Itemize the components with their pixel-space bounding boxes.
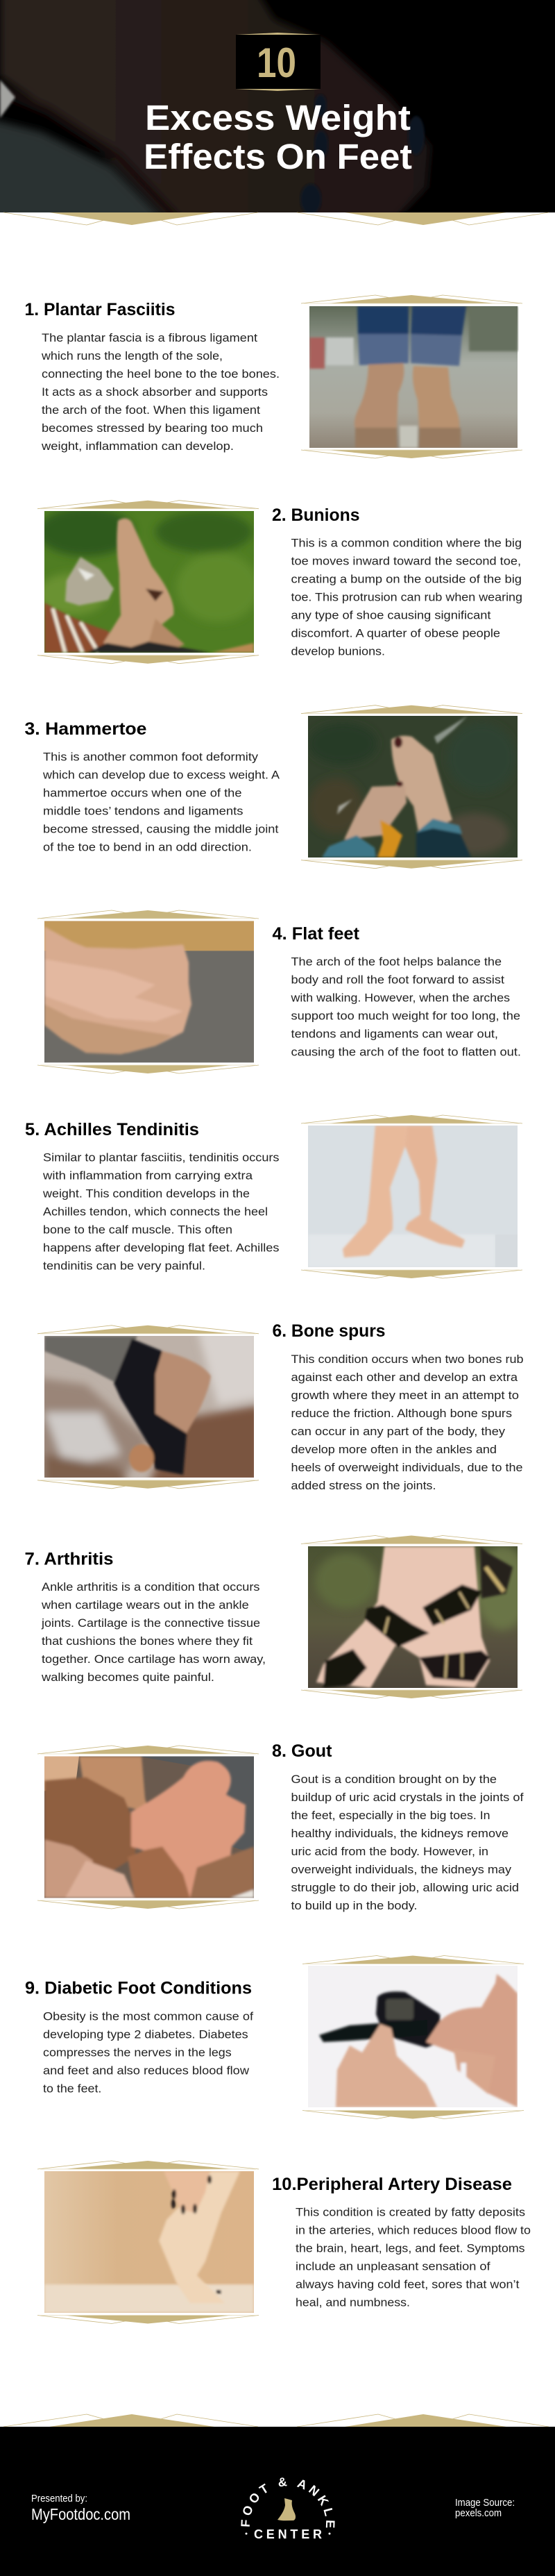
text block: Ankle arthritis is a condition that occurs <box>42 1580 259 1594</box>
text block <box>43 2009 253 2096</box>
text block: compresses the nerves in the legs <box>43 2046 232 2059</box>
text block: Obesity is the most common cause of <box>43 2009 253 2023</box>
title: Effects On Feet <box>144 137 412 176</box>
text block: and feet and also reduces blood flow <box>43 2064 250 2077</box>
logo: Foot &amp; Ankle Center: CENTER <box>254 2527 322 2541</box>
text block: healthy individuals, the kidneys remove <box>291 1827 509 1840</box>
text block: Gout is a condition brought on by the <box>291 1773 497 1786</box>
text block: that cushions the bones where they fit <box>42 1634 253 1648</box>
text block: This is another common foot deformity <box>43 751 259 764</box>
title <box>144 98 412 176</box>
text block <box>291 537 522 658</box>
photo: hands with glucose meter and lancet <box>308 1966 518 2107</box>
text block: struggle to do their job, allowing uric acid <box>291 1881 519 1894</box>
text block: This condition is created by fatty deposits <box>296 2205 525 2219</box>
text block: can occur in any part of the body, they <box>291 1425 506 1438</box>
text block: develop bunions. <box>291 645 385 658</box>
text block: heels of overweight individuals, due to the <box>291 1461 523 1474</box>
text block: middle toes’ tendons and ligaments <box>43 805 243 818</box>
header banner <box>0 0 555 226</box>
image source: Image Source: <box>455 2497 515 2509</box>
text block: tendinitis can be very painful. <box>43 1260 205 1273</box>
panel: 3. Hammertoe <box>25 705 522 869</box>
panel: 7. Arthritis <box>25 1536 530 1698</box>
panel: 8. Gout <box>37 1741 524 1912</box>
text block: It acts as a shock absorber and supports <box>42 385 268 399</box>
heading: 6. Bone spurs <box>272 1321 386 1341</box>
text block: against each other and develop an extra <box>291 1371 518 1384</box>
image source: pexels.com <box>455 2507 502 2519</box>
text block: This condition occurs when two bones rub <box>291 1353 523 1366</box>
footer <box>0 2427 555 2576</box>
panel: 1. Plantar Fasciitis <box>25 295 522 458</box>
heading: 10.Peripheral Artery Disease <box>272 2175 512 2194</box>
text block: overweight individuals, the kidneys may <box>291 1863 512 1876</box>
text block: uric acid from the body. However, in <box>291 1845 488 1858</box>
text block: include an unpleasant sensation of <box>296 2259 490 2273</box>
text block: develop more often in the ankles and <box>291 1443 497 1456</box>
text block <box>291 1353 523 1492</box>
heading: 2. Bunions <box>272 505 359 525</box>
text block: body and roll the foot forward to assist <box>291 973 504 987</box>
text block: causing the arch of the foot to flatten out. <box>291 1046 521 1059</box>
text block <box>296 2205 531 2309</box>
text block: which runs the length of the sole, <box>41 349 223 362</box>
text block: with inflammation from carrying extra <box>42 1169 253 1182</box>
text block: the feet, especially in the big toes. In <box>291 1809 490 1822</box>
heading: 7. Arthritis <box>25 1550 114 1569</box>
heading: 3. Hammertoe <box>25 719 147 739</box>
photo: feet in black strapped sandals <box>308 1546 530 1688</box>
text block: This is a common condition where the big <box>291 537 522 550</box>
text block: happens after developing flat feet. Achilles <box>43 1241 279 1255</box>
heading: 1. Plantar Fasciitis <box>25 300 175 319</box>
text block: to build up in the body. <box>291 1899 418 1912</box>
heading: 4. Flat feet <box>272 924 360 944</box>
panel: 10. Peripheral Artery Disease <box>37 2161 531 2323</box>
text block <box>290 955 521 1059</box>
text block: The plantar fascia is a fibrous ligament <box>42 331 257 344</box>
presented by: MyFootdoc.com <box>31 2505 130 2523</box>
text block: any type of shoe causing significant <box>291 609 491 622</box>
text block: support too much weight for too long, the <box>291 1010 520 1023</box>
text block: when cartilage wears out in the ankle <box>41 1598 249 1612</box>
text block: discomfort. A quarter of obese people <box>291 627 500 640</box>
photo: foot on tiptoe with black nails <box>44 2171 254 2313</box>
heading: 5. Achilles Tendinitis <box>25 1120 199 1139</box>
text block: to the feet. <box>43 2082 101 2096</box>
text block: in the arteries, which reduces blood flow to <box>296 2223 531 2237</box>
text block: Similar to plantar fasciitis, tendinitis occurs <box>43 1151 279 1164</box>
text block <box>42 1151 280 1273</box>
text block <box>42 751 280 854</box>
panel: 9. Diabetic Foot Conditions <box>25 1955 524 2119</box>
photo: feet on forest floor <box>308 716 518 858</box>
presented by <box>31 2493 130 2523</box>
text block: bone to the calf muscle. This often <box>43 1223 232 1237</box>
text block: weight. This condition develops in the <box>42 1187 250 1201</box>
photo: hands holding feet on a mat <box>44 921 254 1062</box>
badge: number 10 <box>236 33 321 91</box>
text block: weight, inflammation can develop. <box>41 440 234 453</box>
text block: which can develop due to excess weight. A <box>42 769 280 782</box>
text block: the arch of the foot. When this ligament <box>42 403 260 417</box>
icon: foot <box>278 2498 296 2520</box>
photo: legs stepping on a white block <box>308 1126 518 1267</box>
panel: 4. Flat feet <box>37 910 521 1073</box>
text block: joints. Cartilage is the connective tissue <box>41 1616 260 1630</box>
text block: toe moves inward toward the second toe, <box>291 555 521 568</box>
text block: become stressed, causing the middle joint <box>43 823 279 836</box>
photo: bare feet in the rain <box>309 306 518 448</box>
logo: Foot &amp; Ankle Center: FOOT & ANKLE <box>241 2477 335 2527</box>
text block: becomes stressed by bearing too much <box>42 421 263 435</box>
text block: added stress on the joints. <box>291 1479 436 1492</box>
text block: growth where they meet in an attempt to <box>291 1389 519 1402</box>
text block <box>41 1580 266 1684</box>
text block: together. Once cartilage has worn away, <box>42 1653 266 1666</box>
panel: 5. Achilles Tendinitis <box>25 1115 522 1278</box>
photo: hands massaging a foot <box>44 1757 254 1898</box>
badge: number 10: 10 <box>257 40 296 86</box>
text block: buildup of uric acid crystals in the joints of <box>291 1791 524 1804</box>
title: Excess Weight <box>145 98 411 137</box>
photo: foot with black sock on wood floor <box>44 1336 254 1478</box>
text block: of the toe to bend in an odd direction. <box>43 841 252 854</box>
text block: toe. This protrusion can rub when wearing <box>291 591 522 604</box>
text block: reduce the friction. Although bone spurs <box>291 1407 512 1420</box>
panel: 2. Bunions <box>37 501 522 664</box>
heading: 8. Gout <box>272 1741 332 1761</box>
text block: creating a bump on the outside of the big <box>291 573 522 586</box>
text block: tendons and ligaments can wear out, <box>291 1028 498 1041</box>
text block <box>41 331 280 453</box>
presented by: Presented by: <box>31 2493 87 2504</box>
text block: developing type 2 diabetes. Diabetes <box>43 2027 248 2041</box>
text block: hammertoe occurs when one of the <box>43 787 241 800</box>
text block: with walking. However, when the arches <box>290 992 510 1005</box>
text block: connecting the heel bone to the toe bones. <box>42 367 280 380</box>
text block <box>291 1773 524 1912</box>
text block: walking becomes quite painful. <box>41 1671 214 1684</box>
header photo: foot with dark nails <box>0 0 555 226</box>
image source <box>455 2497 515 2519</box>
heading: 9. Diabetic Foot Conditions <box>25 1979 252 1998</box>
text block: Achilles tendon, which connects the heel <box>43 1205 268 1219</box>
photo: foot on grass with butterfly <box>37 508 259 653</box>
text block: The arch of the foot helps balance the <box>291 955 502 969</box>
text block: the brain, heart, legs, and feet. Symptoms <box>296 2241 525 2255</box>
text block: heal, and numbness. <box>296 2295 410 2309</box>
text block: always having cold feet, sores that won’t <box>296 2277 520 2291</box>
panel: 6. Bone spurs <box>37 1321 523 1492</box>
